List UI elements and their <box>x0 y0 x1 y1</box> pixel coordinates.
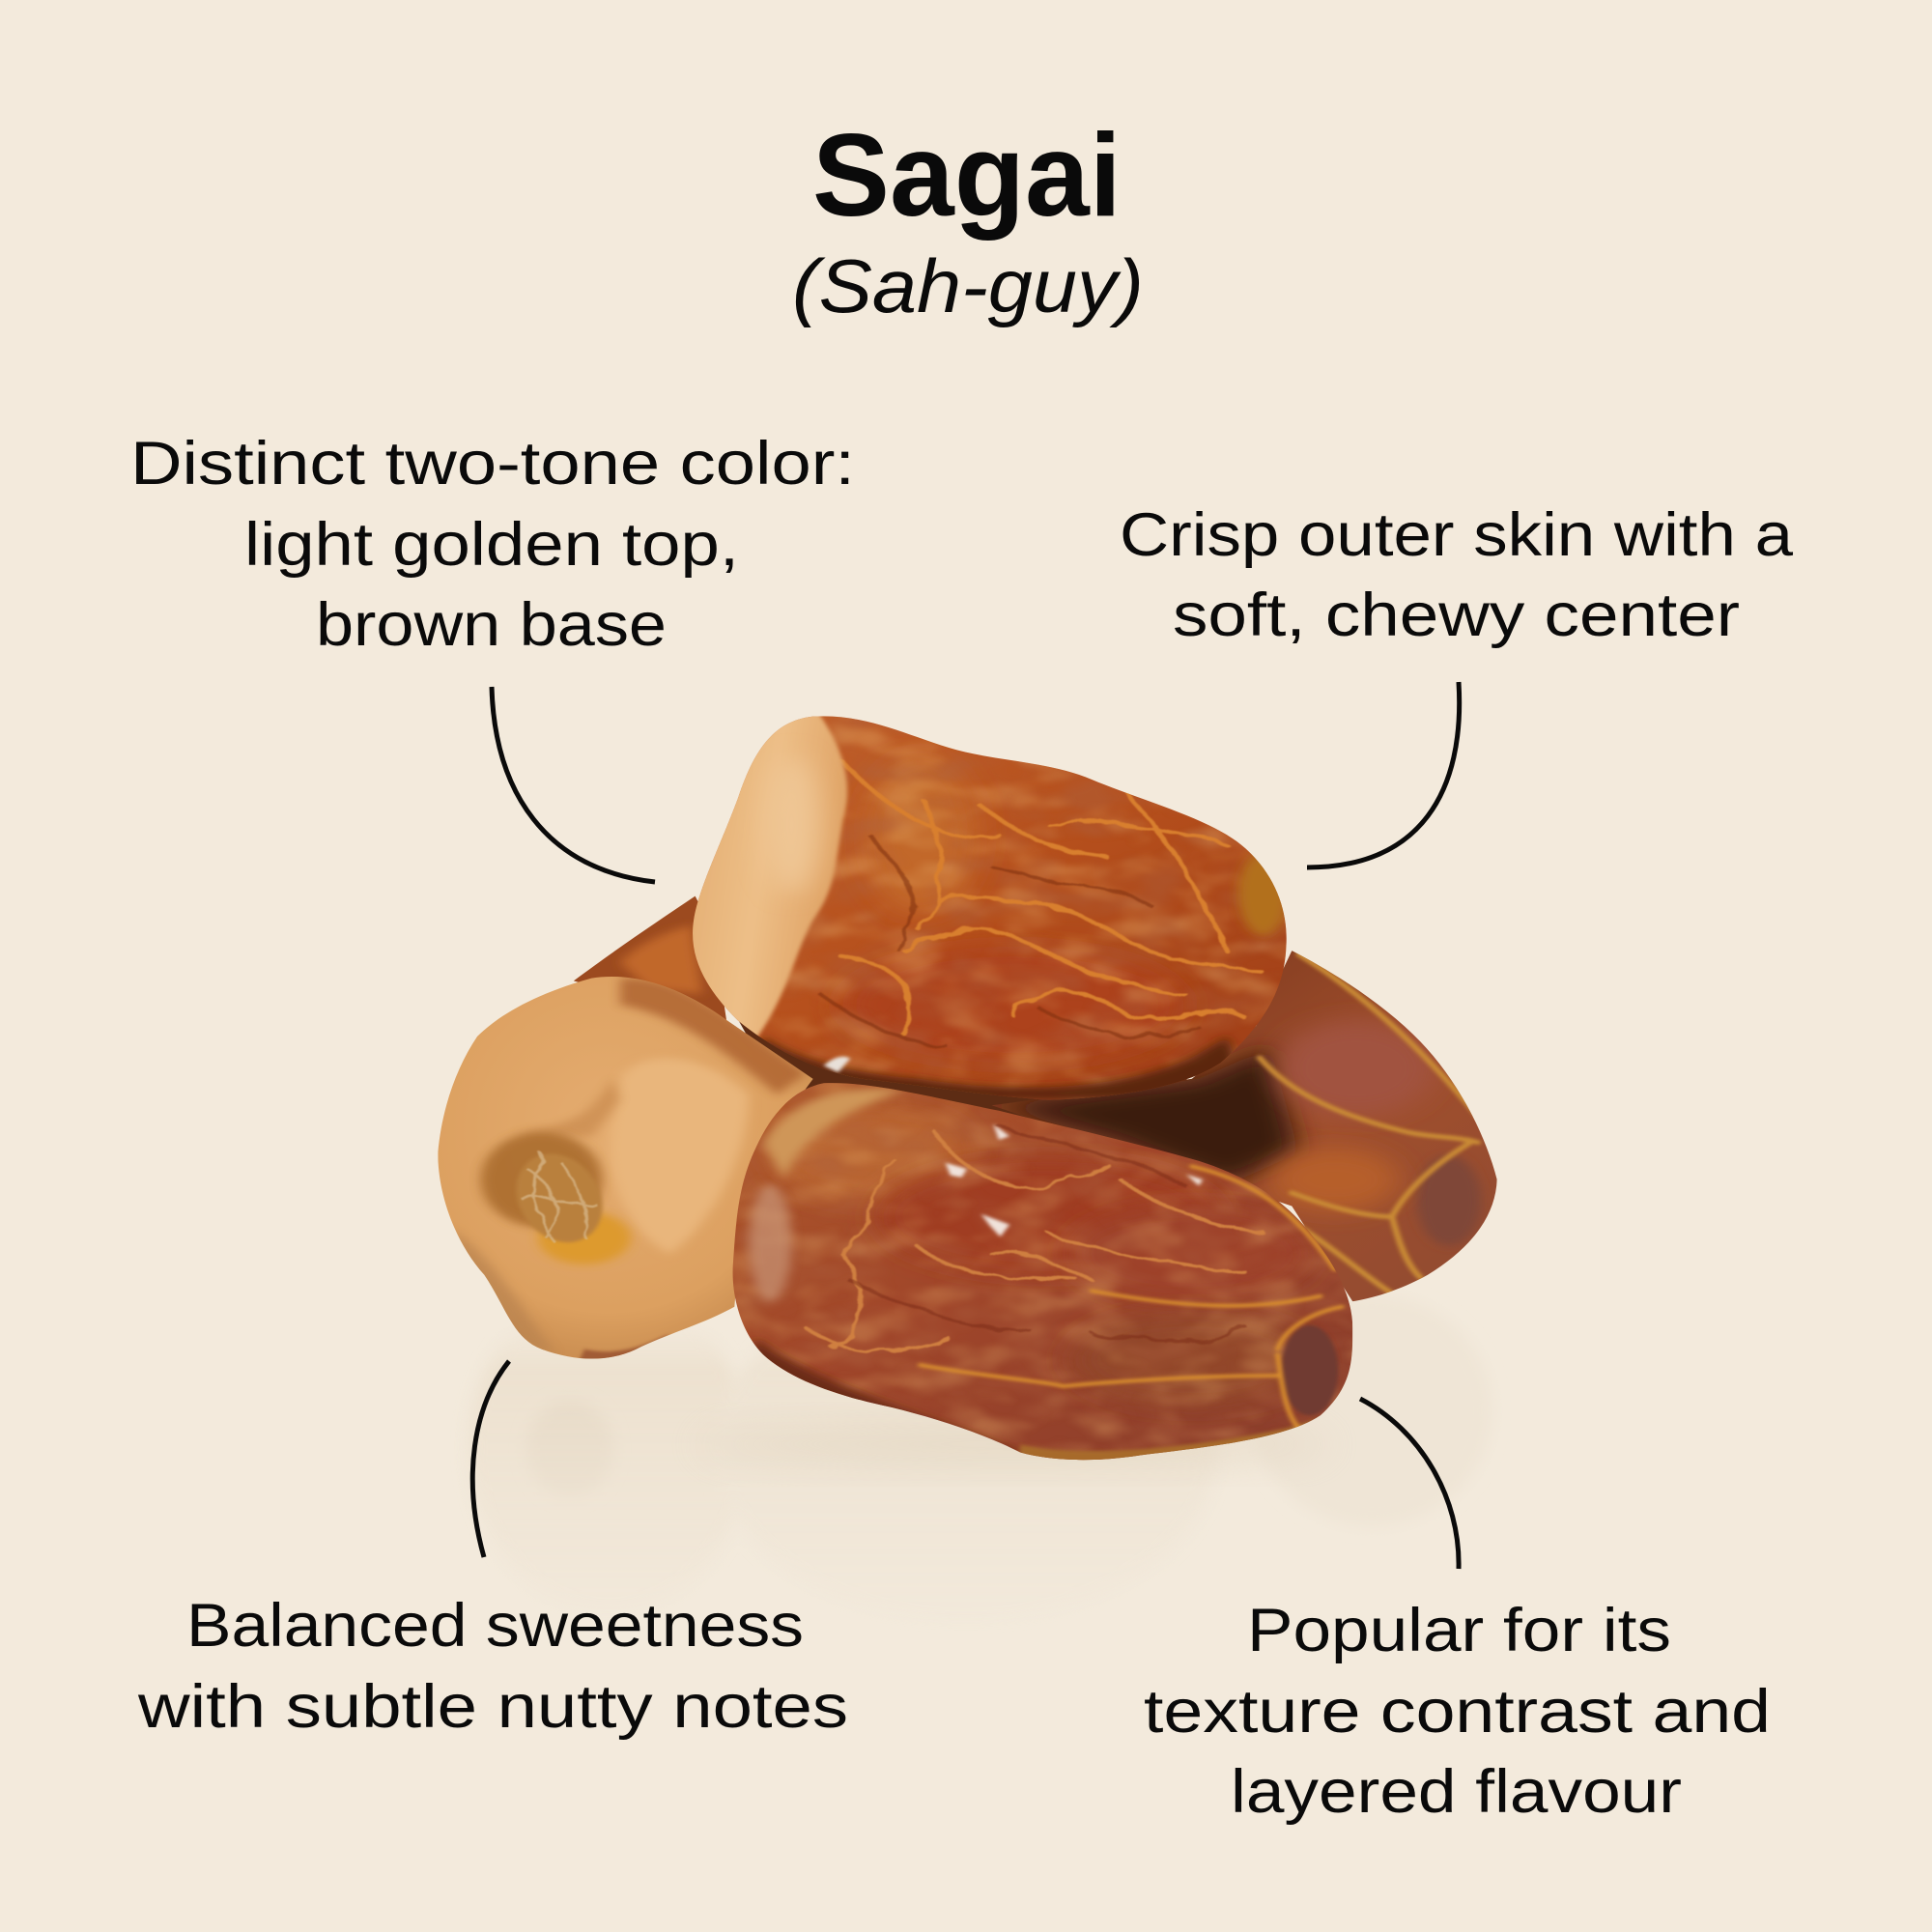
connector: popularity callout arrow <box>1360 1399 1459 1569</box>
callout text: two-tone color <box>130 430 855 659</box>
date: back right <box>992 951 1497 1302</box>
date: left, light golden end with cavity <box>438 977 813 1358</box>
title: Sagai <box>812 109 1122 241</box>
callout text: popularity <box>1144 1597 1771 1826</box>
date: front, glossy wrinkled <box>721 1073 1363 1471</box>
callout text: popularity: texture contrast and <box>1144 1678 1771 1746</box>
photo: pile of sagai dates <box>427 702 1520 1471</box>
shadow gap between dates <box>706 962 1207 1143</box>
subtitle: pronunciation: (Sah-guy) <box>792 243 1144 328</box>
connector: crisp skin callout arrow <box>1307 682 1460 867</box>
connector: sweetness callout arrow <box>472 1361 509 1557</box>
callout text: crisp skin <box>1120 501 1794 649</box>
callout text: two-tone color: light golden top, <box>244 511 739 579</box>
connector: two-tone callout arrow <box>492 687 655 882</box>
reflection of dates <box>475 1352 902 1500</box>
callout text: balanced sweetness: Balanced sweetness <box>186 1592 804 1660</box>
reflection: right date <box>1251 1294 1492 1526</box>
callout text: popularity: Popular for its <box>1247 1597 1671 1664</box>
soft shadow under dates <box>696 1423 1333 1465</box>
callout text: crisp skin: soft, chewy center <box>1173 582 1740 649</box>
date: back left sliver <box>574 896 727 1026</box>
callout text: popularity: layered flavour <box>1231 1758 1682 1826</box>
callout text: two-tone color: brown base <box>316 591 667 659</box>
date: top, two-tone golden and brown <box>693 716 1287 1100</box>
callout text: crisp skin: Crisp outer skin with a <box>1120 501 1794 569</box>
callout text: balanced sweetness <box>137 1592 848 1741</box>
callout text: balanced sweetness: with subtle nutty notes <box>137 1673 848 1741</box>
callout text: two-tone color: Distinct two-tone color: <box>130 430 855 497</box>
